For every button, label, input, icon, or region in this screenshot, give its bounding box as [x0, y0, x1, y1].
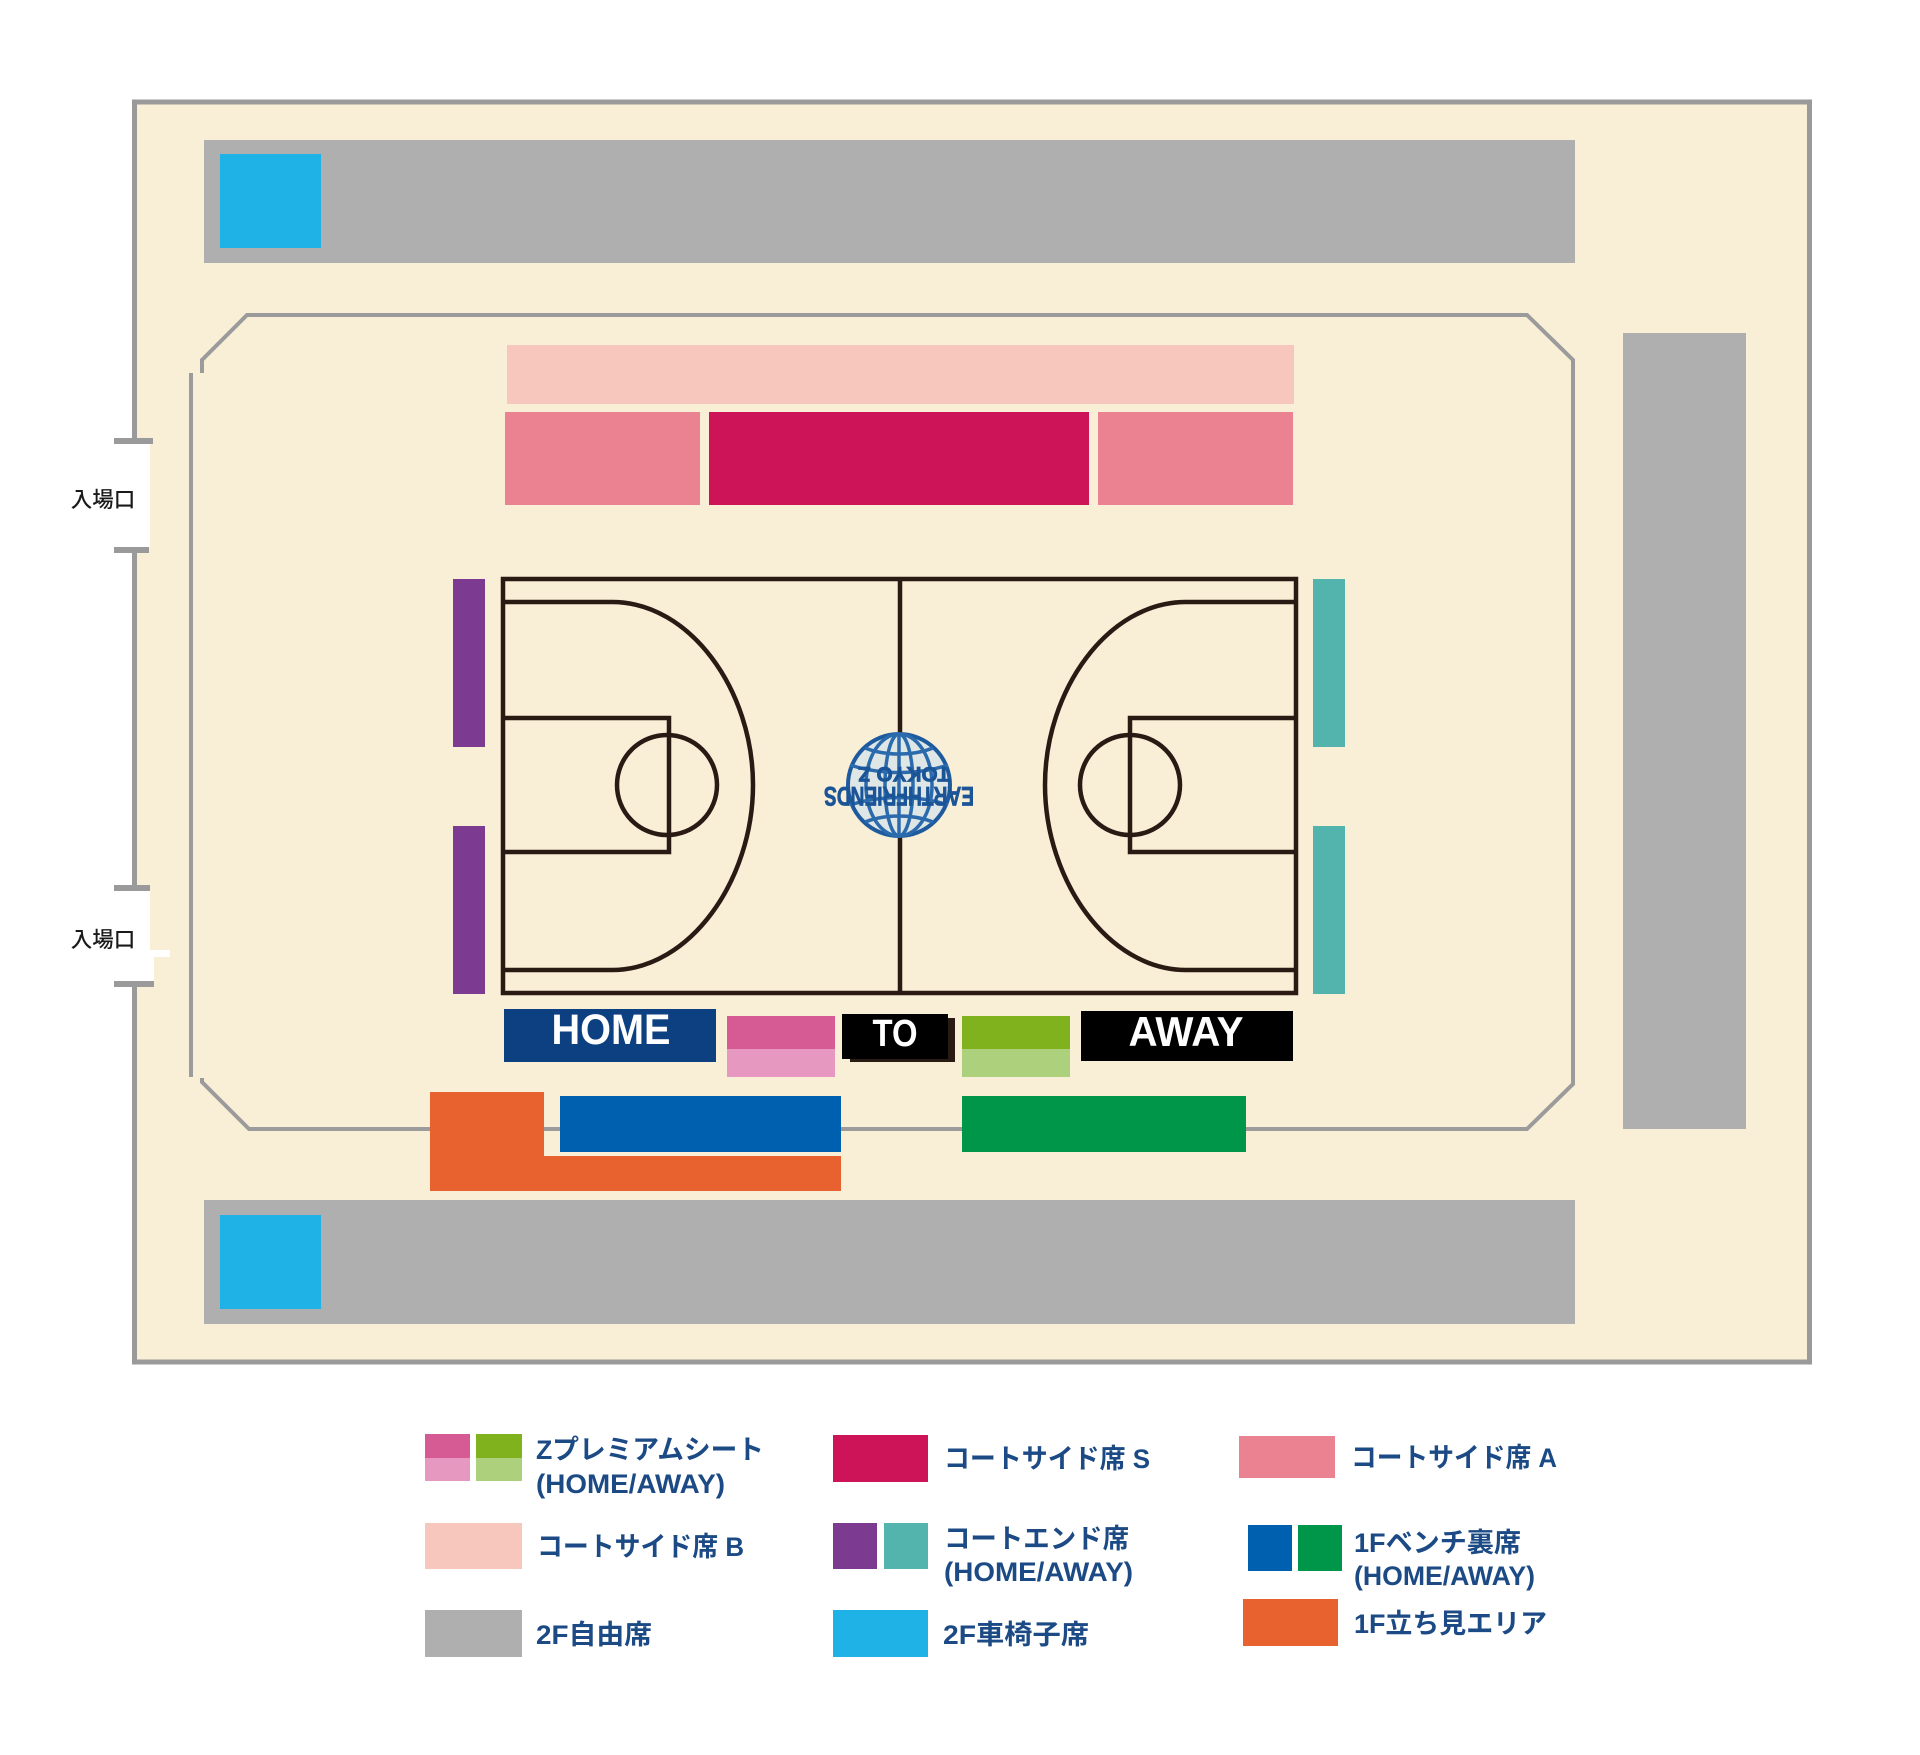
seats: 2F wheelchair bottom	[220, 1215, 321, 1309]
legend item: court end: コートエンド席	[944, 1524, 1129, 1554]
seats: 2F free seating bottom	[204, 1200, 1575, 1324]
seats: Z premium home	[727, 1016, 835, 1077]
legend item: courtside B: コートサイド席 B	[537, 1532, 744, 1562]
basketball court	[503, 579, 1296, 993]
panel: arena floor	[134, 102, 1810, 1362]
legend item: court end	[833, 1523, 1133, 1587]
seats: 1F bench away	[962, 1096, 1246, 1152]
seats: courtside A left	[505, 412, 700, 505]
logo: Earth Friends Tokyo Z globe: EARTHFRIENDS	[824, 781, 974, 811]
legend item: courtside S	[833, 1435, 1150, 1482]
legend item: Z premium seat: Zプレミアムシート	[536, 1435, 764, 1465]
legend item: 1F standing area	[1243, 1599, 1547, 1646]
seats: court end home	[453, 579, 485, 994]
legend item: 1F standing area: 1F立ち見エリア	[1354, 1609, 1547, 1639]
entrance: lower: 入場口	[71, 928, 135, 952]
entrance: lower	[71, 885, 170, 987]
logo: Earth Friends Tokyo Z globe	[824, 734, 974, 836]
seats: courtside B	[507, 345, 1294, 404]
legend item: courtside B	[425, 1523, 744, 1569]
bench label: AWAY	[1081, 1008, 1293, 1061]
legend	[425, 1434, 1557, 1657]
legend item: 2F free seating: 2F自由席	[536, 1620, 652, 1650]
legend item: court end: (HOME/AWAY)	[944, 1557, 1133, 1587]
entrance: upper: 入場口	[71, 488, 135, 512]
bench label: HOME: HOME	[552, 1006, 670, 1054]
legend item: courtside A: コートサイド席 A	[1351, 1443, 1557, 1473]
legend item: 1F bench back: (HOME/AWAY)	[1354, 1561, 1535, 1591]
label: TO	[842, 1013, 955, 1062]
bench label: HOME	[504, 1006, 716, 1062]
legend item: 2F wheelchair: 2F車椅子席	[943, 1620, 1089, 1650]
seats: 1F bench home	[560, 1096, 841, 1152]
legend item: 2F wheelchair	[833, 1610, 1089, 1657]
legend item: courtside S: コートサイド席 S	[944, 1444, 1150, 1474]
seats: courtside A right	[1098, 412, 1293, 505]
seats: 2F free seating top	[204, 140, 1575, 263]
seats: Z premium away	[962, 1016, 1070, 1077]
seats: courtside S	[709, 412, 1089, 505]
legend item: Z premium seat: (HOME/AWAY)	[536, 1469, 725, 1499]
seats: court end away	[1313, 579, 1345, 994]
label: TO: TO	[872, 1013, 918, 1055]
area: 1F standing	[430, 1092, 841, 1191]
seats: 2F wheelchair top	[220, 154, 321, 248]
legend item: courtside A	[1239, 1436, 1557, 1478]
seats: 2F free seating right	[1623, 333, 1746, 1129]
bench label: AWAY: AWAY	[1128, 1008, 1244, 1055]
logo: Earth Friends Tokyo Z globe: TOKYO Z	[858, 762, 950, 785]
legend item: Z premium seat	[425, 1434, 764, 1499]
legend item: 2F free seating	[425, 1610, 652, 1657]
legend item: 1F bench back	[1248, 1525, 1535, 1591]
legend item: 1F bench back: 1Fベンチ裏席	[1354, 1528, 1521, 1558]
entrance: upper	[71, 438, 153, 553]
